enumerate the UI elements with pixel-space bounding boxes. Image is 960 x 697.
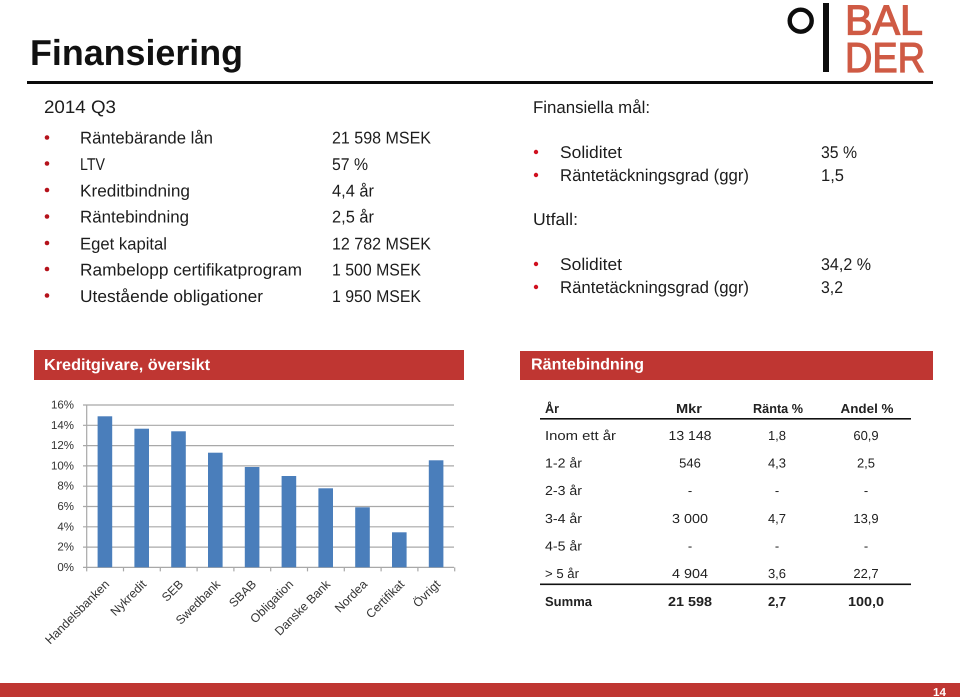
row: Summa [545, 594, 884, 609]
footer bar with page number [0, 683, 960, 697]
row: 4-5 år: - [864, 538, 868, 553]
row: 4-5 år: 4-5 år [545, 538, 583, 553]
targets: 35 % [821, 143, 857, 162]
section header: Kreditgivare: Kreditgivare, översikt [44, 357, 211, 374]
table header: Ränta % [753, 401, 803, 416]
y axis labels: 6% [57, 501, 74, 513]
row: över 5 år: 22,7 [853, 566, 879, 581]
row: 1-2 år: 4,3 [768, 456, 786, 471]
list labels: LTV [80, 155, 106, 174]
list labels: Rambelopp certifikatprogram [80, 261, 302, 280]
title: Finansiering [30, 32, 243, 73]
list labels: Eget kapital [80, 234, 167, 253]
outcome [560, 255, 871, 297]
header rule [27, 81, 933, 84]
row: över 5 år [545, 566, 879, 581]
row: över 5 år: 3,6 [768, 566, 786, 581]
row: över 5 år: 4 904 [672, 566, 708, 581]
row: 1-2 år: 1-2 år [545, 456, 583, 471]
row: Summa: 21 598 [668, 594, 712, 609]
list values: 4,4 år [332, 182, 374, 201]
x axis labels: Danske Bank [272, 577, 334, 638]
row: 4-5 år: - [688, 538, 692, 553]
x axis labels: Nordea [332, 577, 370, 615]
table header: Andel % [840, 401, 894, 416]
list values: 12 782 MSEK [332, 234, 432, 253]
y axis labels [51, 400, 74, 574]
y axis labels: 12% [51, 440, 74, 452]
y axis labels: 2% [57, 542, 74, 554]
x axis labels: Swedbank [173, 577, 224, 627]
outcome: 3,2 [821, 278, 843, 297]
row: Inom ett år: 60,9 [853, 428, 879, 443]
panel: 2014 Q3 key figures [44, 97, 432, 306]
bullets [45, 135, 49, 298]
x axis labels: Certifikat [363, 577, 408, 621]
row: 2-3 år: - [864, 483, 868, 498]
x axis labels: SEB [159, 577, 186, 604]
bars [98, 416, 443, 567]
y axis labels: 14% [51, 420, 74, 432]
y axis labels: 8% [57, 481, 74, 493]
table header: År [545, 401, 559, 416]
x axis labels: Obligation [247, 577, 296, 626]
targets: Soliditet [560, 143, 622, 162]
row: 3-4 år [545, 511, 879, 526]
y axis labels: 4% [57, 521, 74, 533]
list values: 1 500 MSEK [332, 261, 422, 280]
y axis labels: 0% [57, 562, 74, 574]
row: Summa: 2,7 [768, 594, 786, 609]
y axis labels: 10% [51, 460, 74, 472]
panel: financial targets and outcome [533, 98, 871, 297]
list values [332, 128, 432, 306]
row: 4-5 år [545, 538, 868, 553]
heading: Utfall: Utfall: [533, 210, 578, 229]
logo: Balder [790, 0, 925, 81]
row: 1-2 år [545, 456, 875, 471]
row: 1-2 år: 546 [679, 456, 701, 471]
x axis labels: SBAB [226, 577, 259, 610]
list labels: Räntebindning [80, 208, 189, 227]
section header: Kreditgivare [34, 350, 464, 380]
row: 3-4 år: 13,9 [853, 511, 879, 526]
list labels: Utestående obligationer [80, 287, 263, 306]
row: 2-3 år [545, 483, 868, 498]
row: över 5 år: > 5 år [545, 566, 580, 581]
list values: 57 % [332, 155, 368, 174]
row: 3-4 år: 3 000 [672, 511, 708, 526]
row: 2-3 år: 2-3 år [545, 483, 583, 498]
list values: 21 598 MSEK [332, 128, 432, 147]
section header: Räntebindning: Räntebindning [531, 356, 644, 374]
row: Inom ett år: 1,8 [768, 428, 786, 443]
row: 2-3 år: - [688, 483, 692, 498]
x axis labels: Övrigt [410, 577, 444, 610]
row: 1-2 år: 2,5 [857, 456, 875, 471]
heading: 2014 Q3: 2014 Q3 [44, 97, 116, 117]
x axis labels: Handelsbanken [42, 577, 112, 647]
row: 3-4 år: 3-4 år [545, 511, 583, 526]
logo: Balder: DER [845, 34, 925, 81]
outcome: 34,2 % [821, 255, 871, 274]
targets [560, 143, 857, 185]
row: Summa: 100,0 [848, 594, 884, 609]
list values: 2,5 år [332, 208, 374, 227]
bar chart: lenders [42, 400, 455, 647]
section header: Räntebindning [520, 351, 933, 380]
outcome: Räntetäckningsgrad (ggr) [560, 278, 749, 297]
list labels: Kreditbindning [80, 182, 190, 201]
x axis labels: Nykredit [108, 577, 150, 619]
targets: Räntetäckningsgrad (ggr) [560, 166, 749, 185]
y axis labels: 16% [51, 400, 74, 412]
heading: Finansiella mål: Finansiella mål: [533, 98, 650, 117]
table header: Mkr [676, 401, 702, 416]
targets: 1,5 [821, 166, 844, 185]
table: interest rate fixing [540, 401, 911, 609]
row: Inom ett år [545, 428, 879, 443]
list labels: Räntebärande lån [80, 128, 213, 147]
row: 4-5 år: - [775, 538, 779, 553]
table header [545, 401, 894, 416]
bullets [534, 150, 538, 289]
row: 3-4 år: 4,7 [768, 511, 786, 526]
list values: 1 950 MSEK [332, 287, 422, 306]
row: Inom ett år: Inom ett år [545, 428, 617, 443]
outcome: Soliditet [560, 255, 622, 274]
row: Inom ett år: 13 148 [668, 428, 712, 443]
row: Summa: Summa [545, 594, 593, 609]
list labels [80, 128, 302, 306]
row: 2-3 år: - [775, 483, 779, 498]
x axis labels [42, 577, 444, 647]
